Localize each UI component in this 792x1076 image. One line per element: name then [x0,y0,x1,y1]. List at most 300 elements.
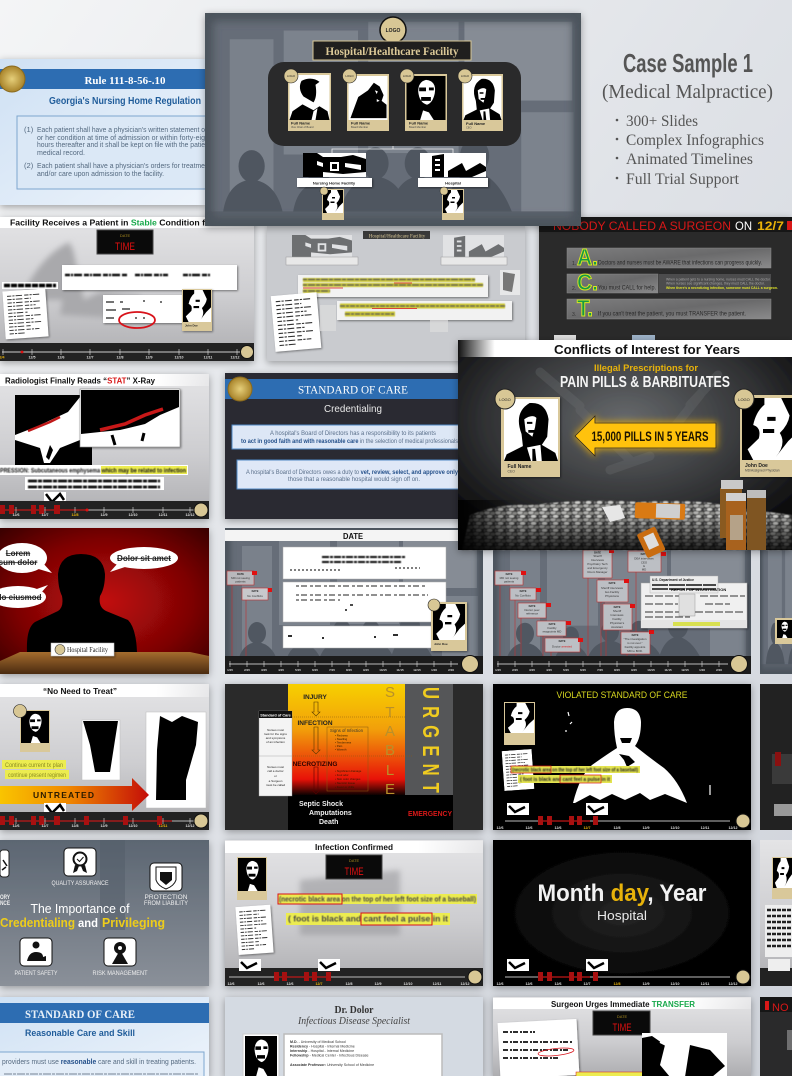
slide: Violated Standard of Care: 12/10 [670,826,680,830]
slide: investigation timeline: Sheriff [593,554,602,558]
slide: Urgent, infection progression [225,684,483,830]
slide: red silhouette witness with speech bubbles: Dolor sit amet [117,554,171,563]
slide: Urgent, infection progression: and symptoms [266,736,286,740]
slide: right-edge partial, row 3 [760,530,792,674]
slide: Urgent, infection progression: A [385,723,395,740]
slide: Urgent, infection progression: B [385,742,395,759]
heading: Hospital/Healthcare Facility [313,41,471,60]
slide: Month day, Year: Hospital [597,908,647,923]
slide: Infection Confirmed: DATE [349,858,360,863]
slide: investigation timeline: CEO [641,560,648,564]
slide: DATE with documents and timeline: DATE [252,589,259,593]
slide: Urgent, infection progression: Amputations [309,810,352,817]
slide: Urgent, infection progression: • Pain [335,744,343,748]
card: John Doe, physician: MD/Assigned Physician [745,468,780,472]
slide: investigation timeline: Assistant [611,625,623,629]
slide: Nobody called a surgeon on 12/7: A. [577,244,598,270]
slide: No Need to Treat: 12/9 [100,824,108,828]
slide: Rule 111-8-56-.10: (1) [24,125,34,134]
slide: Violated Standard of Care: VIOLATED STANDARD OF CARE [556,690,688,700]
slide: Conflicts of Interest for Years: Conflicts of Interest for Years [554,343,740,357]
slide: hospital / healthcare facility org chart [205,13,581,226]
slide: Facility Receives a Patient: 12/10 [174,356,184,360]
slide: Urgent, infection progression: Nurses must [267,765,284,769]
slide: Violated Standard of Care: 12/11 [701,826,709,830]
slide: investigation timeline: DATE [506,572,513,576]
bullet list: Complex Infographics [626,132,764,149]
slide: investigation timeline: & [643,564,645,568]
slide: investigation timeline: is not over." [627,641,643,645]
slide: Infection Confirmed: ( foot is black and cant feel a pulse in it [288,914,448,924]
slide: The Importance of Credentialing and Privileging: NCE [0,900,10,907]
slide: Urgent, infection progression: S [385,684,395,701]
slide: Infection Confirmed: 12/7 [316,982,322,986]
slide: DATE with documents and timeline: 9/15 [363,668,369,672]
slide: Month day, Year: 12/6 [526,982,532,986]
slide: Radiologist Finally Reads STAT X-Ray: 12/10 [128,513,138,517]
slide: Standard of Care, Credentialing: those that a reasonable hospital would sign off on. [288,476,420,483]
slide: DATE with documents and timeline: 8/15 [346,668,352,672]
slide: Rule 111-8-56-.10: (2) [24,161,34,170]
slide: investigation timeline: Psychiatry Tech [587,562,608,566]
card: board member 1: LOGO [287,74,296,78]
slide: Month day, Year: 12/8 [614,982,620,986]
slide: Standard of Care, Credentialing: A hospital's Board of Directors has a responsibility to its patients [270,430,437,437]
pill bottles [602,480,766,558]
slide: investigation timeline: MD [642,568,646,572]
card: board member 2: Full Name [351,120,371,126]
slide: Nobody called a surgeon on 12/7: ON [735,219,752,233]
slide: Surgeon Urges Immediate Transfer [493,997,751,1076]
slide: Conflicts of Interest for Years [458,340,792,558]
slide: Urgent, infection progression: EMERGENCY [408,811,452,818]
slide: Infection Confirmed: 12/9 [374,982,382,986]
slide: Rule 111-8-56-.10: Each patient shall have a physician's written statement o [37,125,205,134]
slide: The Importance of Credentialing and Privileging: QUALITY ASSURANCE [52,880,109,887]
slide: investigation timeline: and Emergency [587,566,608,570]
slide: DATE with documents and timeline: 5/15 [295,668,301,672]
slide: Violated Standard of Care: ( foot is black and cant feel a pulse in it [520,777,610,783]
slide: investigation timeline: Sheriff [613,609,621,613]
slide: Urgent, infection progression: • Significant drainage [335,769,362,773]
slide: Violated Standard of Care: (necrotic black area on the top of her left foot size of a baseball) [512,768,638,774]
card: board member 2: LOGO [345,74,354,78]
slide: Urgent, infection progression: URGENT [417,687,443,800]
slide: Urgent, infection progression: • Tenderness [335,740,352,744]
slide: Infection Confirmed: (necrotic black area on the top of her left foot size of a baseball) [279,896,476,904]
slide: Nobody called a surgeon on 12/7: 1. [572,261,576,267]
slide: Dr. Dolor, Infectious Disease Specialist: Associate Professor: University School of Medicine [290,1063,374,1067]
slide: investigation timeline: DATE [559,639,566,643]
slide: DATE with documents and timeline: 6/15 [312,668,318,672]
slide: Facility Receives a Patient: 12/11 [204,356,212,360]
slide: Standard of Care, Reasonable Care and Skill [0,997,209,1076]
slide: Month day, Year: 12/11 [701,982,709,986]
icon: patient safety [20,938,52,966]
card: John Doe, physician: LOGO [738,397,750,402]
slide: Urgent, infection progression: must be called [266,783,286,787]
slide: No Need to Treat: 12/8 [72,824,78,828]
logo: facility [380,17,406,43]
slide: Rule 111-8-56-.10: hours thereafter and it shall be kept on file with the patie [37,140,205,149]
slide: Violated Standard of Care: 12/6 [526,826,532,830]
slide: Urgent, infection progression: Signs of Infection [330,728,364,733]
slide: Standard of Care, Credentialing [225,373,472,519]
slide: investigation timeline: 6/15 [580,668,586,672]
slide: Urgent, infection progression: • Fever or chills [335,785,355,789]
slide: investigation timeline: Facility [612,617,622,621]
slide: The Importance of Credentialing and Privileging: PATIENT SAFETY [14,970,58,977]
slide: Infection Confirmed: 12/6 [228,982,234,986]
slide: Standard of Care, Credentialing: Credentialing [324,404,382,415]
slide: right-edge partial, row 6 [760,997,792,1076]
slide: investigation timeline: U.S. Department of Justice [652,578,694,582]
card: Full Name, CEO [495,389,560,477]
slide: DATE with documents and timeline: John Doe [434,642,448,646]
slide: Facility Receives a Patient: 12/9 [146,356,152,360]
slide: Urgent, infection progression: Death [319,819,338,826]
slide: Urgent, infection progression: or [274,774,277,778]
slide: right-edge partial, row 5 [760,840,792,986]
facility: nursing home [297,153,372,220]
slide: Urgent, infection progression: of an infection [266,740,285,744]
slide: Urgent, infection progression: Nurses must [267,728,284,732]
slide: investigation timeline: DATE [529,604,536,608]
card: CEO: LOGO [461,74,470,78]
card: Full Name, CEO: LOGO [499,397,511,402]
slide: Rule 111-8-56-.10: medical record. [37,148,85,157]
slide: Rule 111-8-56-.10: Each patient shall have a physician's orders for treatme [37,161,205,170]
slide: Rule 111-8-56-.10: Georgia's Nursing Home Regulation [49,96,201,107]
slide: Facility Receives a Patient: 12/6 [58,356,64,360]
slide: Urgent, infection progression: look for the signs [264,732,287,736]
slide: No Need to Treat [0,684,209,830]
slide: Month day, Year: 12/6 [496,982,504,986]
slide: The Importance of Credentialing and Privileging: and [78,916,98,930]
pile of pills [458,500,792,550]
facility: hospital [418,153,488,220]
slide: Dr. Dolor, Infectious Disease Specialist: Dr. Dolor [334,1005,374,1016]
slide: Infection Confirmed: 12/6 [258,982,264,986]
slide: Month day, Year [493,840,751,986]
slide: Nobody called a surgeon on 12/7: You must CALL for help. [598,284,656,292]
slide: Standard of Care, Reasonable Care and Skill: Reasonable Care and Skill [25,1028,135,1039]
slide: Dr. Dolor, Infectious Disease Specialist: Infectious Disease Specialist [297,1016,410,1027]
slide: investigation timeline: DATE [641,552,648,556]
slide: DATE with documents and timeline: 1/15 [227,668,233,672]
slide: Urgent, infection progression: T [385,704,395,721]
slide: Dr. Dolor, Infectious Disease Specialist: Internship - Hospital - Internal Medicine [290,1049,354,1053]
slide: Nobody called a surgeon on 12/7: 2. [572,286,576,292]
slide: Urgent, infection progression: INJURY [303,694,327,701]
slide: investigation timeline: patients [504,580,515,584]
slide: Infection Confirmed: 12/6 [286,982,294,986]
slide: The Importance of Credentialing and Privileging: The Importance of [30,901,130,916]
slide: investigation timeline: DEA interviews [634,556,654,560]
card: Full Name, CEO: Full Name [508,464,532,470]
slide: DATE with documents and timeline: DATE [343,531,363,541]
slide: Urgent, infection progression: • Skin color changes [335,777,361,781]
slide: Rule 111-8-56-.10 [0,59,217,205]
slide: Standard of Care, Reasonable Care and Skill: STANDARD OF CARE [25,1009,135,1021]
slide: Surgeon Urges Immediate Transfer: Surgeon Urges Immediate TRANSFER [551,1000,695,1009]
slide: Urgent, infection progression: • Foul odor [335,773,349,777]
card: Full Name, CEO: CEO [508,470,515,474]
slide: No Need to Treat: Continue current tx plan [5,762,63,769]
slide: grayed facility chart with highlighted citations [267,226,525,361]
slide: investigation timeline: Physicians [605,594,619,598]
card: board member 1: Vice Chair of Board [291,125,314,129]
slide: Infection Confirmed: Infection Confirmed [315,843,393,852]
slide: Nobody called a surgeon on 12/7 [539,217,792,340]
slide: DATE with documents and timeline: 10/15 [379,668,387,672]
slide: Facility Receives a Patient [0,217,254,361]
slide: investigation timeline: Sheriff interviews [601,586,624,590]
slide: investigation timeline: Doctor arrested [552,644,572,648]
slide: Nobody called a surgeon on 12/7: If you can't treat the patient, you must TRANSFER the patient. [598,310,746,318]
slide: No Need to Treat: 12/7 [42,824,48,828]
slide: Radiologist Finally Reads STAT X-Ray: 12/8 [72,513,78,517]
slide: DATE with documents and timeline: 2/15 [244,668,250,672]
slide: Rule 111-8-56-.10: Rule 111-8-56-.10 [84,75,166,87]
slide: investigation timeline: reappoints MD [543,630,561,634]
slide: Rule 111-8-56-.10: and/or care upon admission to the facility. [37,169,164,178]
slide: No Need to Treat: 12/6 [12,824,20,828]
slide: Month day, Year: 12/6 [554,982,562,986]
slide: Radiologist Finally Reads STAT X-Ray: 12/9 [100,513,108,517]
slide: Urgent, infection progression: Standard of Care [260,714,291,718]
slide: red silhouette witness with speech bubbles: Lorem [6,549,30,558]
card: board member 1: Full Name [291,120,311,126]
slide: investigation timeline: DATE [520,589,527,593]
slide: investigation timeline: 1/15 [495,668,501,672]
slide: Urgent, infection progression: Septic Shock [299,801,343,808]
slide: Radiologist Finally Reads STAT X-Ray: 12/11 [159,513,167,517]
slide: Violated Standard of Care: 12/7 [584,826,590,830]
slide: investigation timeline: Room Manager [588,570,607,574]
logo: facility: LOGO [386,28,400,34]
slide: red silhouette witness with speech bubbles: Hospital Facility [67,646,108,654]
slide: Facility Receives a Patient: Facility Receives a Patient in Stable Condition f [10,218,205,228]
slide: No Need to Treat: 12/10 [128,824,138,828]
slide: investigation timeline: "The investigation [624,637,647,641]
slide: grayed facility chart with highlighted citations: Hospital/Healthcare Facility [369,234,426,240]
slide: Month day, Year: 12/7 [584,982,590,986]
slide: Dr. Dolor, Infectious Disease Specialist [225,997,483,1076]
icon: protection from liability [150,863,182,891]
slide: Conflicts of Interest for Years: PAIN PILLS & BARBITUATES [560,374,730,391]
slide: Urgent, infection progression: E [385,781,395,798]
slide: Facility Receives a Patient: 12/7 [86,356,94,360]
bullet list: Full Trial Support [626,171,740,188]
text block: Case Sample 1 [602,48,773,188]
subheading: Medical Malpractice: (Medical Malpractice) [602,82,773,103]
slide: investigation timeline: 8/15 [614,668,620,672]
slide: DATE with documents and timeline: 3/15 [261,668,267,672]
slide: investigation timeline: 1/16 [699,668,705,672]
slide: Urgent, infection progression: • Necrotic tissue [335,781,356,785]
slide: investigation timeline [493,530,751,674]
slide: Infection Confirmed: 12/12 [460,982,470,986]
slide: Urgent, infection progression: • Redness [335,734,348,738]
slide: DATE with documents and timeline: DATE [237,572,244,576]
slide: Violated Standard of Care: 12/8 [614,826,620,830]
slide: investigation timeline: DATE [632,633,639,637]
slide: Nobody called a surgeon on 12/7: NOBODY CALLED A SURGEON [553,219,731,233]
slide: investigation timeline: DATE [594,550,601,554]
card: board member 3 [400,69,447,131]
slide: investigation timeline: DATE [609,581,616,585]
slide: Urgent, infection progression: a Surgeon [269,779,283,783]
slide: Urgent, infection progression: L [386,762,394,779]
slide: investigation timeline: 9/15 [631,668,637,672]
card: CEO: Full Name [466,121,486,126]
slide: The Importance of Credentialing and Privileging: Privileging [102,915,165,930]
slide: investigation timeline: 10/15 [647,668,655,672]
slide: investigation timeline: 2/16 [716,668,722,672]
slide: Standard of Care, Credentialing: STANDARD OF CARE [298,384,408,396]
slide: Nobody called a surgeon on 12/7: When a patient gets to a nursing home, nurses must CALL the doctor. [666,278,771,282]
slide: Facility Receives a Patient: 12/12 [230,356,240,360]
slide: right-edge partial, row 6: NO [772,1002,789,1014]
slide: Radiologist Finally Reads STAT X-Ray: 12/12 [186,513,194,517]
slide: Facility Receives a Patient: TIME [115,241,135,253]
bullet list: Animated Timelines [626,151,753,168]
card: board member 3: LOGO [403,74,412,78]
slide: Radiologist Finally Reads STAT X-Ray [0,374,209,519]
slide: Radiologist Finally Reads STAT X-Ray: PRESSION: Subcutaneous emphysema which may be related to infection [0,468,186,474]
slide: investigation timeline: MD not seeing [500,576,519,580]
slide: investigation timeline: MD to BOD. [627,649,643,653]
slide: Dr. Dolor, Infectious Disease Specialist: M.D. - University of Medical School [290,1040,346,1044]
slide: Infection Confirmed: 12/8 [346,982,352,986]
slide: Radiologist Finally Reads STAT X-Ray: 12/7 [42,513,48,517]
arrow: 15,000 pills in 5 years: 15,000 PILLS IN 5 YEARS [592,428,708,444]
slide: Violated Standard of Care: 12/6 [496,826,504,830]
slide: investigation timeline: Interviews [591,558,605,562]
slide: Radiologist Finally Reads STAT X-Ray: 12/6 [12,513,20,517]
slide: investigation timeline: 5/15 [563,668,569,672]
slide: Conflicts of Interest for Years: Illegal Prescriptions for [594,363,698,374]
slide: investigation timeline: 4/15 [546,668,552,672]
slide: investigation timeline: 7/15 [597,668,603,672]
slide: Violated Standard of Care: 12/9 [642,826,650,830]
slide: Nobody called a surgeon on 12/7: T. [577,295,593,321]
panel: board members [268,62,521,146]
slide: Violated Standard of Care: 12/6 [554,826,562,830]
card: CEO: CEO [466,126,472,130]
slide: No Need to Treat: 12/12 [186,824,194,828]
slide: Facility Receives a Patient: John Doe [185,324,198,328]
slide: The Importance of Credentialing and Privileging: ORY [0,894,10,901]
bullet list: 300+ Slides [626,113,698,130]
slide: The Importance of Credentialing and Privileging: RISK MANAGEMENT [92,970,148,977]
slide: investigation timeline: 12/15 [681,668,689,672]
slide: investigation timeline: reference [526,612,538,616]
slide: investigation timeline: DATE [549,622,556,626]
slide: DATE with documents and timeline: 4/15 [278,668,284,672]
card: John Doe, physician: John Doe [745,463,768,469]
slide: Month day, Year: 12/10 [670,982,680,986]
arrow: 15,000 pills in 5 years [575,416,716,456]
card: John Doe, physician [734,389,792,477]
card: board member 2 [342,69,389,131]
slide: DATE with documents and timeline: 12/15 [413,668,421,672]
slide: Dr. Dolor, Infectious Disease Specialist: Fellowship - Medical Center - Infectious Disease [290,1054,368,1058]
slide: Urgent, infection progression: NECROTIZING [293,761,337,768]
slide: investigation timeline: Physician's [610,621,625,625]
slide: DATE with documents and timeline [225,528,483,674]
slide: DATE with documents and timeline: No Conflicts [247,594,263,598]
card: board member 1 [284,69,331,131]
slide: Violated Standard of Care [493,684,751,830]
slide: investigation timeline: 2/15 [512,668,518,672]
slide: DATE with documents and timeline: 2/16 [448,668,454,672]
slide: Month day, Year: 12/12 [728,982,738,986]
icon: quality assurance [64,848,96,876]
slide: DATE with documents and timeline: 11/15 [396,668,404,672]
facility: nursing home: Nursing Home Facility [313,180,356,186]
slide: Standard of Care, Reasonable Care and Skill: providers must use reasonable care and skill in treating patients. [2,1059,196,1066]
slide: Rule 111-8-56-.10: or her condition at time of admission or within forty-eig [37,133,205,142]
slide: Urgent, infection progression: • Swelling [335,737,348,741]
slide: The Importance of Credentialing and Privileging: FROM LIABILITY [144,900,189,907]
slide: investigation timeline: DATE [614,605,621,609]
slide: Infection Confirmed: 12/11 [433,982,441,986]
slide: Month day, Year: 12/9 [642,982,650,986]
slide: No Need to Treat: 12/11 [159,824,167,828]
slide: Urgent, infection progression: • Warmth [335,748,347,752]
slide: right-edge partial, row 4 [760,684,792,830]
card: board member 2: Board Member [351,125,368,129]
slide: Nobody called a surgeon on 12/7: 3. [572,312,576,318]
heading: Hospital/Healthcare Facility: Hospital/Healthcare Facility [326,44,458,58]
slide: investigation timeline: Facility [548,626,557,630]
slide: Nobody called a surgeon on 12/7: When there's a necrotizing infection, someone must CALL a surgeon. [666,286,778,290]
slide: investigation timeline: Facility appoints [625,645,646,649]
slide: Dr. Dolor, Infectious Disease Specialist: Residency - Hospital - Internal Medicine [290,1044,355,1048]
slide: DATE with documents and timeline: 1/16 [431,668,437,672]
slide: Urgent, infection progression: INFECTION [297,720,333,727]
card: CEO [458,69,503,131]
slide: No Need to Treat: “No Need to Treat” [43,687,117,696]
card: board member 3: Board Member [409,125,426,129]
slide: Violated Standard of Care: 12/12 [728,826,738,830]
slide: Nobody called a surgeon on 12/7: C. [577,269,598,295]
slide: Facility Receives a Patient: 12/8 [116,356,124,360]
slide: DATE with documents and timeline: patients [235,580,246,584]
slide: Nobody called a surgeon on 12/7: When nurses see significant changes, they must CALL the doctor. [666,282,765,286]
slide: DATE with documents and timeline: 7/15 [329,668,335,672]
slide: Infection Confirmed: TIME [344,866,364,878]
facility: hospital: Hospital [445,180,461,186]
slide: Surgeon Urges Immediate Transfer: DATE [617,1014,628,1019]
slide: The Importance of Credentialing and Privileging: Credentialing [0,915,75,930]
slide: The Importance of Credentialing and Privileging [0,840,209,986]
slide: investigation timeline: Interviews [610,613,624,617]
slide: investigation timeline: 11/15 [664,668,672,672]
slide: investigation timeline: Doctor peer [524,608,540,612]
slide: red silhouette witness with speech bubbles [0,528,209,674]
slide: Nobody called a surgeon on 12/7: 12/7 [757,219,784,233]
slide: Surgeon Urges Immediate Transfer: TIME [612,1022,632,1034]
slide: Standard of Care, Credentialing: A hospital's Board of Directors owes a duty to vet, review, select, and approve only [246,469,458,476]
icon: risk management [104,938,136,966]
slide: Month day, Year: Month day, Year [538,880,706,907]
slide: investigation timeline: 3/15 [529,668,535,672]
slide: No Need to Treat: UNTREATED [33,790,94,800]
slide: Standard of Care, Credentialing: to act in good faith and with reasonable care in the selection of medical professionals [241,438,459,445]
